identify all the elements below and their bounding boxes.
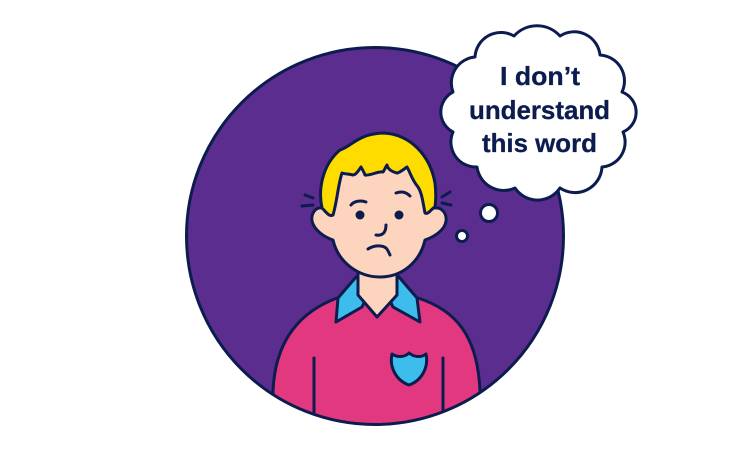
shirt bbox=[273, 298, 480, 440]
stress marks bbox=[302, 192, 451, 206]
bubble text: understand bbox=[469, 95, 610, 125]
circle outline bbox=[186, 48, 564, 424]
sleeve seams bbox=[314, 358, 443, 413]
boy bbox=[273, 133, 480, 440]
head and ears bbox=[312, 150, 446, 277]
thought bubble bbox=[441, 26, 636, 241]
bubble text: this word bbox=[482, 128, 597, 158]
illustration: confused boy with thought bubble bbox=[185, 24, 638, 426]
small thought dots bbox=[480, 204, 498, 222]
collar bbox=[336, 268, 420, 322]
bubble text: I don’t bbox=[500, 61, 580, 91]
eyebrows bbox=[351, 192, 410, 205]
cloud outline bbox=[441, 26, 636, 200]
mouth bbox=[368, 246, 390, 255]
shield badge bbox=[391, 353, 427, 385]
neck bbox=[358, 268, 397, 317]
bubble text bbox=[469, 61, 610, 158]
purple circle background bbox=[186, 48, 564, 424]
hair bbox=[321, 133, 436, 215]
face features bbox=[302, 192, 451, 255]
eyes bbox=[356, 210, 404, 220]
nose bbox=[376, 225, 386, 235]
